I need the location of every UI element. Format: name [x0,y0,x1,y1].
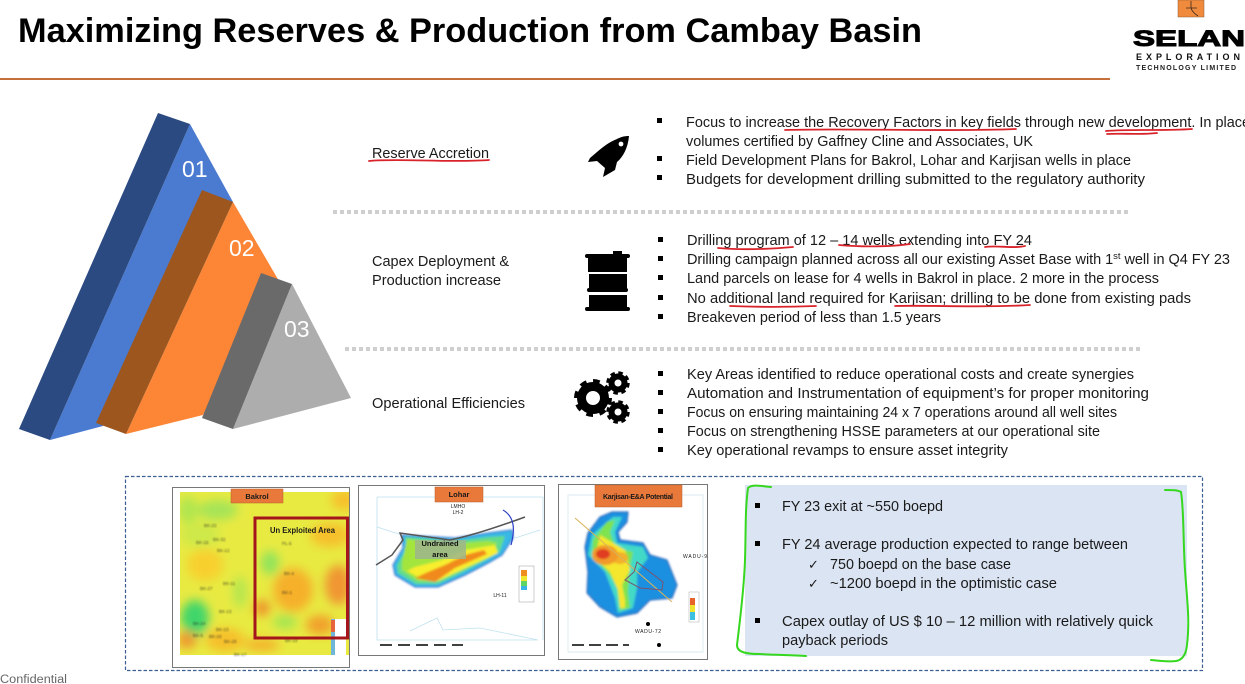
row 2 bullet list: Breakeven period of less than 1.5 years [687,310,941,326]
callout: unexploited area: Un Exploited Area [270,525,335,535]
row 2 bullet list: Land parcels on lease for 4 wells in Bakrol in place. 2 more in the process [687,271,1159,287]
row 1 bullet list: Budgets for development drilling submitted to the regulatory authority [686,172,1146,188]
row 2 bullet list: Drilling campaign planned across all our existing Asset Base with 1 [687,252,1113,268]
title: Maximizing Reserves & Production from Cambay Basin [18,12,922,50]
logo: Selan [1133,0,1245,72]
row 1 bullet list: Field Development Plans for Bakrol, Lohar and Karjisan wells in place [686,153,1131,169]
callout: unexploited area [255,518,348,638]
label: Karjisan [595,485,682,507]
row 3 bullet list: Automation and Instrumentation of equipment’s for proper monitoring [687,386,1149,402]
row 2 label: Capex Deployment: Production increase [372,273,501,289]
label: Bakrol: Bakrol [245,492,269,501]
header rule [0,78,1110,80]
row 2 label: Capex Deployment [372,254,509,289]
icon: gears [576,374,628,422]
icon: rocket [588,136,629,177]
row 2 bullet list: well in Q4 FY 23 [1120,252,1230,268]
map markers: BK-24 [193,621,206,626]
map: Karjisan: WADU-9 [683,554,707,560]
production outlook box: ~1200 boepd in the optimistic case [830,576,1057,592]
map markers: BK-17 [234,652,247,657]
pyramid graphic: 02 [229,235,255,261]
production outlook box: 750 boepd on the base case [830,557,1011,573]
icon: barrel [585,251,630,311]
map markers: BK-32 [213,537,226,542]
row 3 bullet list: Key operational revamps to ensure asset integrity [687,443,1009,459]
map: Bakrol [172,488,359,668]
panel: maps and production outlook [126,476,1202,670]
map markers: BK-1 [282,590,293,595]
production outlook box: Capex outlay of US $ 10 – 12 million with relatively quick [782,614,1154,630]
map: Karjisan [558,484,708,660]
row 2 bullet list: st [1113,251,1121,262]
map markers: BK-16 [209,634,222,639]
map markers: BK-27 [200,586,213,591]
pyramid graphic: 01 [182,156,208,182]
map markers: BK-11 [223,581,236,586]
logo: Selan: SELAN [1133,26,1245,51]
divider 1 [333,210,1130,214]
production outlook box: ✓ [808,557,819,572]
logo: Selan: EXPLORATION [1136,52,1240,62]
pyramid graphic: 03 [284,316,310,342]
map markers: BK-22 [204,523,217,528]
map markers: BK-12 [217,548,230,553]
row 1 label: Reserve Accretion: Reserve Accretion [372,146,489,162]
map: Karjisan: WADU-72 [635,629,661,635]
map markers: BK-5 [193,633,204,638]
label: Lohar: Lohar [449,490,469,499]
row 3 bullet list: Focus on strengthening HSSE parameters at our operational site [687,424,1100,440]
map markers: PL-5 [282,541,292,546]
map: Lohar: LH-2 [453,510,464,516]
map: Lohar: Undrained [421,539,459,548]
map: Lohar: area [432,550,449,559]
map markers [193,523,298,657]
label: Bakrol [231,489,283,503]
map markers: BK-28 [224,639,237,644]
map markers: BK-13 [216,627,229,632]
map: Lohar: LMHO [451,504,465,510]
map markers: BK-13 [219,609,232,614]
production outlook box: FY 24 average production expected to range between [782,537,1128,553]
map markers: BK-18 [285,638,298,643]
row 2 bullet list: Drilling program of 12 – 14 wells extending into FY 24 [687,233,1032,249]
row 2 bullet list [658,233,1230,326]
divider 2 [345,347,1140,351]
row 3 label: Operational Efficiencies: Operational Efficiencies [372,396,525,412]
row 3 bullet list [658,367,1149,459]
green hand-drawn bracket [737,486,1188,661]
production outlook box: ✓ [808,576,819,591]
production outlook box: FY 23 exit at ~550 boepd [782,499,943,515]
logo: Selan: TECHNOLOGY LIMITED [1136,65,1236,72]
map markers: BK-4 [284,571,295,576]
production outlook box: payback periods [782,633,888,649]
map markers: BK-15 [196,540,209,545]
production outlook box [745,485,1187,656]
row 3 bullet list: Key Areas identified to reduce operational costs and create synergies [687,367,1134,383]
row 1 bullet list: Focus to increase the Recovery Factors in key fields through new development. In place [686,115,1245,131]
row 1 bullet list: volumes certified by Gaffney Cline and Associates, UK [686,134,1033,150]
label: Lohar [435,487,483,502]
label: Karjisan: Karjisan-E&A Potential [603,494,673,501]
row 1 bullet list [657,115,1245,188]
pyramid graphic [19,113,351,440]
map: Lohar [358,486,544,656]
row 2 bullet list: No additional land required for Karjisan; drilling to be done from existing pads [687,291,1191,307]
row 2 label: Capex Deployment: Capex Deployment & [372,254,509,270]
map: Lohar: LH-11 [493,593,507,599]
row 3 bullet list: Focus on ensuring maintaining 24 x 7 operations around all well sites [687,405,1117,421]
